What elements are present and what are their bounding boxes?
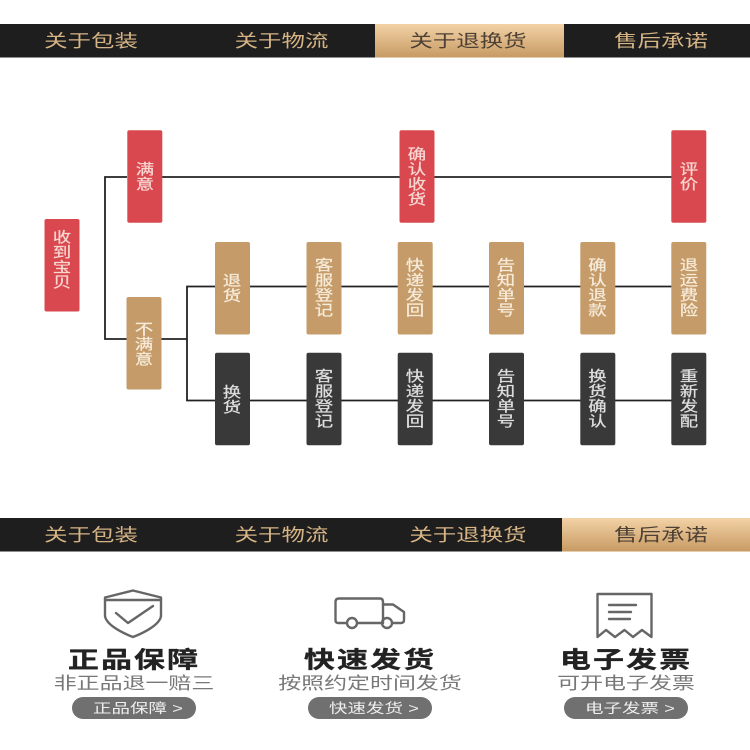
return: 确认退款: 款 — [588, 302, 607, 319]
return: 告知单号: 号 — [497, 302, 515, 319]
heading: 快速发货: 快速发货 — [304, 646, 436, 673]
flow step: 确认收货: 货 — [408, 191, 426, 208]
return: 确认退款 — [580, 242, 615, 334]
icon: delivery truck — [336, 598, 404, 628]
flow step: 评价 — [671, 130, 706, 223]
text: 非正品退一赔三: 非正品退一赔三 — [54, 674, 214, 693]
exchange: 快递发回: 快 — [406, 368, 425, 385]
second navigation bar: 关于退换货 — [409, 526, 527, 545]
return: 告知单号: 单 — [497, 287, 515, 304]
return: 退运费险: 运 — [680, 272, 698, 289]
promise: fast shipping — [278, 598, 462, 719]
flow step: 收到宝贝: 宝 — [53, 259, 71, 276]
exchange: 告知单号: 单 — [497, 398, 515, 415]
return: 退货: 退 — [223, 273, 241, 289]
return: 客服登记: 客 — [315, 257, 333, 274]
flow step: 确认收货: 收 — [408, 176, 426, 193]
flow step: 确认收货: 确 — [408, 146, 426, 163]
return: 退货: 货 — [223, 288, 241, 304]
button: 电子发票: 电子发票 > — [585, 701, 675, 716]
flow step: 满意: 满 — [136, 161, 154, 178]
exchange: 换货确认: 认 — [588, 413, 607, 430]
return: 确认退款: 认 — [588, 272, 607, 289]
heading: 正品保障: 正品保障 — [68, 646, 200, 673]
second navigation bar: 关于物流 — [235, 526, 328, 545]
return: 退运费险: 险 — [680, 302, 699, 319]
icon: receipt — [598, 594, 652, 637]
flow step: 不满意: 意 — [135, 351, 153, 368]
exchange: 告知单号: 号 — [497, 413, 515, 430]
exchange: 客服登记: 客 — [315, 368, 333, 385]
promise: genuine guarantee — [54, 590, 214, 719]
exchange: 告知单号: 知 — [497, 383, 515, 400]
button: 正品保障 — [72, 697, 196, 719]
exchange: 重新发配: 新 — [680, 383, 698, 400]
top navigation bar: 售后承诺 — [614, 32, 708, 51]
exchange: 客服登记 — [306, 353, 342, 445]
top navigation bar — [0, 24, 750, 58]
return: 快递发回: 发 — [406, 287, 424, 304]
flow step: 满意: 意 — [136, 176, 154, 193]
exchange: 换货确认: 确 — [588, 398, 607, 415]
flow step: 评价: 价 — [680, 176, 699, 193]
flow step: 确认收货 — [400, 130, 434, 223]
return: 快递发回: 快 — [406, 257, 425, 274]
exchange: 重新发配: 发 — [680, 398, 698, 415]
return: 客服登记: 记 — [315, 302, 333, 319]
return: 退运费险: 费 — [680, 287, 698, 304]
flow step: 收到宝贝: 到 — [53, 244, 71, 261]
exchange: 换货: 货 — [223, 399, 241, 416]
exchange: 快递发回: 递 — [406, 383, 424, 400]
flow step: 不满意: 满 — [135, 336, 153, 353]
return: 退货 — [215, 242, 250, 334]
return: 确认退款: 确 — [588, 257, 607, 274]
button: 快速发货 — [308, 697, 432, 719]
exchange: 客服登记: 登 — [315, 398, 334, 415]
top navigation bar: 关于物流 — [235, 32, 328, 51]
top navigation bar: 关于退换货 — [409, 32, 527, 51]
second navigation bar: 关于包装 — [44, 526, 138, 545]
flow step: 收到宝贝: 贝 — [53, 274, 71, 291]
exchange: 告知单号 — [489, 353, 524, 445]
flow step: 不满意: 不 — [135, 321, 153, 338]
return: 快递发回: 回 — [406, 302, 424, 319]
exchange: 重新发配: 配 — [680, 413, 699, 430]
exchange: 换货 — [215, 353, 250, 445]
flow step: 收到宝贝: 收 — [53, 229, 71, 246]
button: 正品保障: 正品保障 > — [93, 701, 183, 716]
top navigation bar: 关于包装 — [44, 32, 138, 51]
promise: electronic invoice — [557, 594, 695, 719]
exchange: 换货确认: 货 — [588, 383, 607, 400]
return: 客服登记 — [306, 242, 342, 334]
exchange: 快递发回: 回 — [406, 413, 424, 430]
exchange row — [215, 353, 706, 445]
exchange: 重新发配 — [671, 353, 706, 445]
return: 退运费险: 退 — [680, 257, 698, 274]
button: 快速发货: 快速发货 > — [329, 701, 419, 716]
flow step: 不满意 — [126, 297, 162, 390]
flow step: 满意 — [127, 130, 162, 223]
icon: shield with check — [105, 590, 161, 637]
return: 快递发回: 递 — [406, 272, 424, 289]
exchange: 客服登记: 服 — [315, 383, 334, 400]
text: 可开电子发票: 可开电子发票 — [557, 674, 695, 693]
text: 按照约定时间发货: 按照约定时间发货 — [278, 674, 462, 693]
exchange: 告知单号: 告 — [497, 368, 515, 385]
exchange: 客服登记: 记 — [315, 413, 333, 430]
exchange: 重新发配: 重 — [680, 368, 698, 385]
return: 快递发回 — [398, 242, 433, 334]
return: 告知单号: 知 — [497, 272, 515, 289]
return: 告知单号 — [489, 242, 524, 334]
exchange: 快递发回: 发 — [406, 398, 424, 415]
flow step: 收到宝贝 — [44, 219, 80, 312]
return: 告知单号: 告 — [497, 257, 515, 274]
second navigation bar: 售后承诺 — [614, 526, 708, 545]
return: 退运费险 — [671, 242, 706, 334]
exchange: 换货确认 — [580, 353, 615, 445]
return: 客服登记: 服 — [315, 272, 334, 289]
heading: 电子发票: 电子发票 — [560, 646, 692, 673]
second navigation bar — [0, 518, 750, 552]
flow step: 评价: 评 — [680, 161, 698, 178]
exchange: 换货: 换 — [223, 384, 242, 401]
flow step: 确认收货: 认 — [408, 161, 427, 178]
exchange: 快递发回 — [398, 353, 433, 445]
return row — [215, 242, 706, 334]
return: 确认退款: 退 — [588, 287, 607, 304]
return: 客服登记: 登 — [315, 287, 334, 304]
flow connector lines — [105, 177, 672, 400]
exchange: 换货确认: 换 — [588, 368, 607, 385]
